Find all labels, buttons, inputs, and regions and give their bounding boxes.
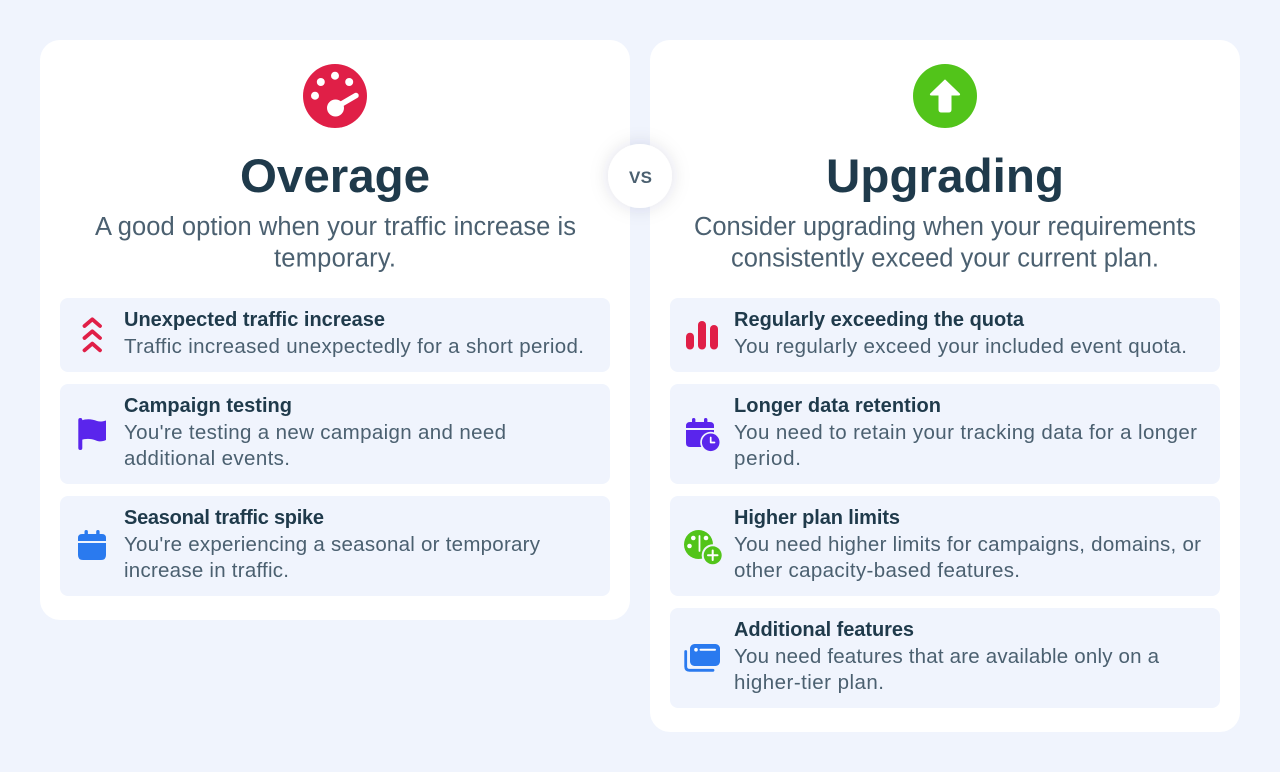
icon: red bars [686, 321, 718, 350]
text: campaign testing [124, 395, 506, 470]
item: seasonal traffic spike [60, 496, 610, 596]
icon: blue calendar [78, 530, 106, 560]
text: higher plan limits: Higher plan limits [734, 507, 900, 529]
text: longer data retention: Longer data retention [734, 395, 941, 417]
text: campaign testing: additional events. [124, 447, 290, 470]
text: campaign testing: Campaign testing [124, 395, 292, 417]
text: unexpected traffic increase: Traffic increased unexpectedly for a short period. [124, 335, 584, 358]
text: regularly exceeding the quota [734, 309, 1187, 358]
item: longer data retention [670, 384, 1220, 484]
icon: green up arrow [913, 64, 977, 128]
text: additional features: You need features that are available only on a [734, 645, 1160, 668]
text: higher plan limits [734, 507, 1201, 582]
heading: Overage: Overage [240, 150, 430, 203]
subtitle: overage [95, 213, 576, 272]
panel: upgrading [650, 40, 1240, 732]
icon: calendar with clock [686, 418, 721, 453]
subtitle: upgrading: consistently exceed your current plan. [731, 244, 1159, 272]
subtitle: overage: temporary. [274, 244, 396, 272]
icon: red gauge [303, 64, 367, 128]
icon: green gauge with plus [684, 530, 724, 566]
text: additional features: higher-tier plan. [734, 671, 884, 694]
text: longer data retention: You need to retain your tracking data for a longer [734, 421, 1197, 444]
panel: overage [40, 40, 630, 620]
item: campaign testing [60, 384, 610, 484]
text: higher plan limits: other capacity-based features. [734, 559, 1020, 582]
text: seasonal traffic spike: increase in traffic. [124, 559, 289, 582]
icon: triple chevron [84, 319, 100, 350]
text: unexpected traffic increase: Unexpected traffic increase [124, 309, 385, 331]
text: additional features [734, 619, 1160, 694]
subtitle: upgrading [694, 213, 1196, 272]
text: longer data retention: period. [734, 447, 801, 470]
text: unexpected traffic increase [124, 309, 584, 358]
subtitle: upgrading: Consider upgrading when your requirements [694, 213, 1196, 241]
text: regularly exceeding the quota: Regularly exceeding the quota [734, 309, 1025, 331]
text: seasonal traffic spike: Seasonal traffic spike [124, 507, 324, 529]
text: additional features: Additional features [734, 619, 914, 641]
badge: vs [608, 144, 672, 208]
subtitle: overage: A good option when your traffic increase is [95, 213, 576, 241]
icon: stacked windows [686, 644, 720, 670]
item: unexpected traffic increase [60, 298, 610, 372]
badge: vs: VS [629, 168, 652, 187]
item: additional features [670, 608, 1220, 708]
text: higher plan limits: You need higher limits for campaigns, domains, or [734, 533, 1201, 556]
text: seasonal traffic spike: You're experiencing a seasonal or temporary [124, 533, 541, 556]
item: higher plan limits [670, 496, 1220, 596]
text: campaign testing: You're testing a new campaign and need [124, 421, 506, 444]
item: regularly exceeding the quota [670, 298, 1220, 372]
text: seasonal traffic spike [124, 507, 541, 582]
text: longer data retention [734, 395, 1197, 470]
heading: Upgrading: Upgrading [826, 150, 1064, 203]
icon: purple flag [78, 418, 106, 450]
text: regularly exceeding the quota: You regularly exceed your included event quota. [734, 335, 1187, 358]
